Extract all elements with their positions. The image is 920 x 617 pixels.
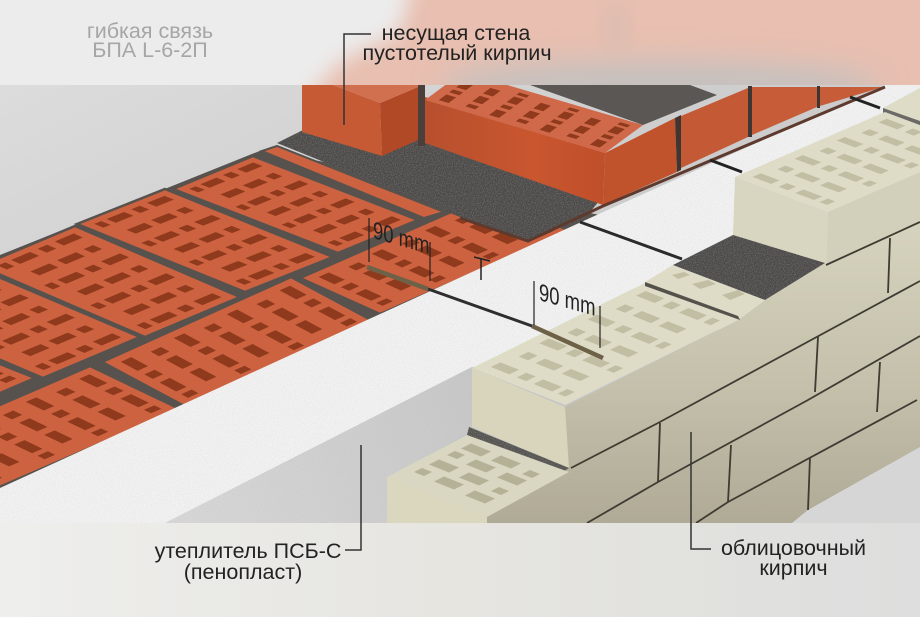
label: insulation: (пенопласт): [184, 560, 302, 584]
brick left face: [472, 368, 569, 468]
label: flexible tie: БПА L-6-2П: [92, 38, 208, 62]
tie sand-coated end: [532, 326, 603, 358]
brick top front centre: [102, 277, 375, 407]
header brick right face: [380, 87, 418, 156]
narrow red strip: [262, 146, 444, 218]
leader: load-bearing wall: [344, 34, 371, 125]
insulation front face: [165, 367, 472, 523]
brick top: [645, 265, 765, 320]
mortar patch: [673, 235, 825, 300]
blurred brick reflection: [306, 0, 920, 85]
holes: [672, 272, 745, 300]
brick left face: [733, 177, 828, 265]
brick top edge left: [0, 342, 35, 460]
bottom band: [0, 523, 920, 617]
stretcher brick end: [820, 87, 883, 106]
label: load-bearing wall: пустотелый кирпич: [362, 41, 552, 65]
flexible ties: [367, 97, 880, 326]
facing brick: upper: [733, 88, 920, 265]
floor visible right of facing wall: [792, 447, 920, 523]
leader: facing brick: [691, 432, 711, 549]
dimension: 90 mm on facing brick: 90 mm: [539, 278, 595, 322]
joint: [748, 86, 752, 137]
tie: black section middle: [580, 222, 682, 259]
load-bearing wall: red hollow bricks: [302, 72, 885, 241]
mortar on long brick: [530, 85, 717, 125]
facing brick: low front: [387, 435, 569, 523]
facing wall front surface: [487, 222, 920, 523]
tie: black section far: [850, 97, 880, 108]
header brick left face: [302, 85, 382, 156]
stretcher brick: [681, 88, 748, 168]
label: load-bearing wall: несущая стена: [382, 21, 530, 45]
brick top third: [0, 226, 240, 337]
dimension: 90 mm on inner wall: [369, 216, 430, 281]
label: flexible tie: гибкая связь: [87, 19, 213, 43]
brick holes: [414, 444, 540, 504]
vertical joint: [418, 85, 425, 146]
label: insulation: утеплитель ПСБ-С: [155, 539, 341, 563]
insulation top surface: [0, 85, 920, 523]
tie: sand-coated end in inner wall: [367, 267, 428, 289]
insulation bed under red bricks: [0, 150, 600, 500]
mortar between front bricks: [467, 427, 569, 475]
facing brick: front with tie: [472, 282, 740, 468]
header brick top: [333, 85, 418, 103]
dimension: 90 mm on facing brick: [534, 278, 600, 348]
brick top far: [173, 156, 418, 253]
back joint: [883, 108, 920, 126]
tie: black section: [710, 160, 742, 172]
brick top fourth: [0, 267, 140, 378]
long brick end face: [603, 118, 677, 205]
long brick top with holes: [425, 72, 643, 153]
brick top: [735, 112, 920, 212]
back brick: [883, 88, 920, 125]
long brick front face: [425, 97, 605, 205]
wall base mortar line: [460, 87, 885, 241]
mark: cavity tick: [474, 257, 490, 280]
brick left face: [387, 477, 487, 523]
brick right face: [826, 170, 920, 265]
label: facing brick: облицовочный: [721, 536, 866, 560]
brick top second: [77, 189, 333, 292]
label: facing brick: кирпич: [759, 556, 828, 580]
brick top with holes: [472, 283, 738, 405]
facing brick: middle: [645, 235, 825, 320]
joint: [675, 115, 681, 172]
tie: black section near: [428, 289, 532, 326]
stretcher brick: [752, 87, 817, 135]
brick top front left: [0, 366, 180, 491]
mortar bed dark layer: [277, 130, 600, 240]
dimension: 90 mm on inner wall: 90 mm: [373, 216, 429, 260]
red brick course: hollow brick tops: [0, 146, 570, 491]
brick top: [387, 435, 569, 517]
leader: insulation: [345, 445, 361, 550]
top band: [0, 0, 920, 110]
joint: [817, 86, 820, 108]
background: grey floor: [0, 85, 920, 525]
facing wall mortar joints: [571, 222, 920, 523]
brick top front right: [300, 195, 570, 314]
joint: [645, 282, 740, 320]
